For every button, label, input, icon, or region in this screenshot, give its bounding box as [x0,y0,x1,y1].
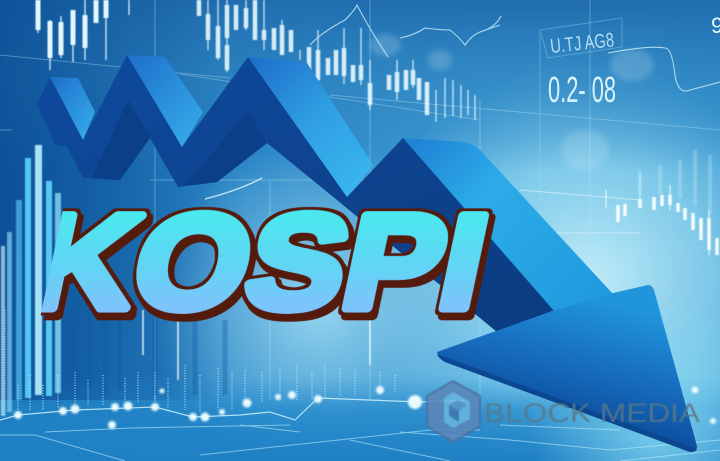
arrow: light top face 1 [50,77,95,140]
candlestick chart: top centre [199,0,475,122]
bar chart: bottom left [1,145,61,416]
candlestick chart: right [606,185,717,255]
trend lines top right [310,5,720,233]
watermark logo [427,381,700,442]
falling arrow [37,55,697,452]
bright vertical lines under title [143,310,370,380]
faint chart line [205,178,262,199]
title: KOSPI: KOSPI [16,186,500,337]
arrow: light top face 2 [127,55,203,147]
soft glints [369,34,654,170]
arrow: head lower shade [437,354,697,452]
logo: wordmark: BLOCK MEDIA [484,398,700,428]
faint upper right bars [640,150,710,215]
city glow: bottom network of light [0,386,720,461]
candlestick chart: top left [38,0,129,70]
vertical dark stripes: lower left [15,310,225,400]
arrow: dark front face [37,55,555,332]
sparkle columns: bottom skyline [5,310,395,415]
logo: hexagon icon [427,381,480,442]
arrow: light top face 4 [403,138,613,312]
display panel with background readouts [540,13,720,200]
readout: small: U.TJ AG8 [549,29,615,58]
arrow: light top face 3 [248,57,373,197]
readout: large: 0.2- 08 [548,69,616,110]
arrow: inner fold shade [92,100,267,187]
arrow: head face [437,285,697,452]
